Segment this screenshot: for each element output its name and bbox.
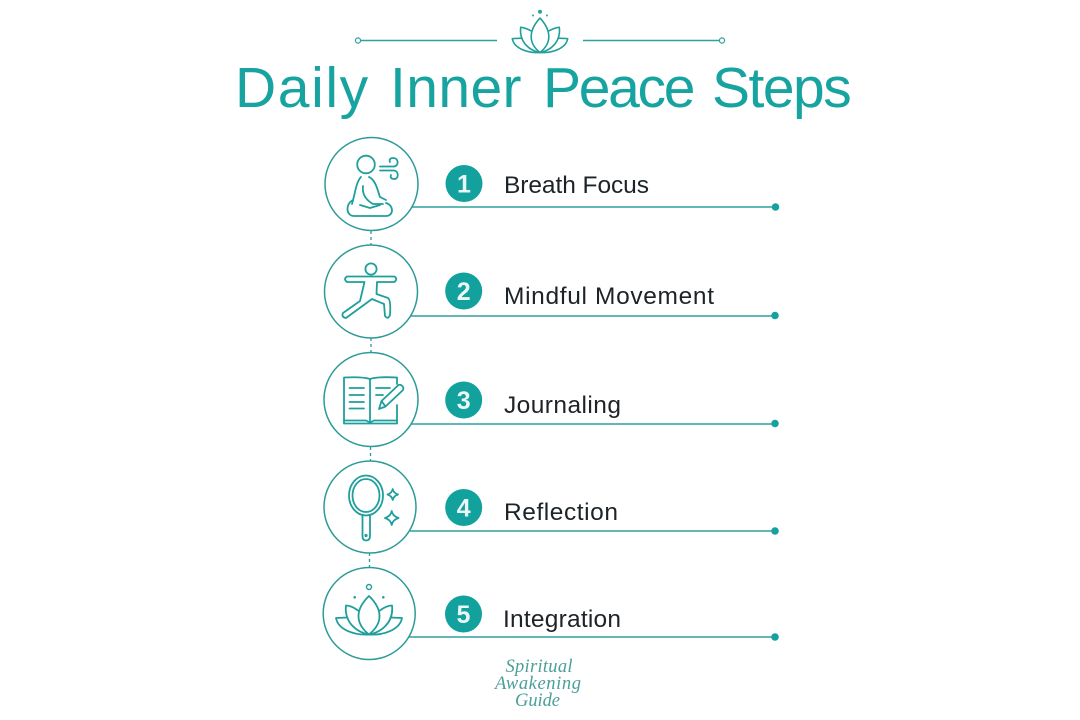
step 2: Mindful Movement [324, 245, 779, 338]
footer brand text: Guide [515, 691, 560, 711]
step number 4: 4 [457, 494, 471, 522]
step number 4 [445, 489, 482, 526]
icon: lotus flower [336, 584, 402, 635]
icon: warrior yoga pose [342, 263, 396, 318]
step 1: Breath Focus [325, 138, 779, 230]
label: Integration: Integration [503, 606, 621, 633]
title: Daily [235, 56, 370, 120]
icon: open journal and pen [344, 377, 403, 424]
step 4: Reflection [324, 461, 779, 553]
step number 1: 1 [457, 170, 471, 198]
title: Steps [712, 56, 850, 120]
step number 1 [446, 165, 482, 202]
footer brand text [493, 657, 581, 711]
step number 3: 3 [457, 387, 471, 415]
step number 2: 2 [457, 278, 471, 306]
step number 5: 5 [457, 601, 471, 629]
icon: meditating figure breathing [347, 156, 398, 216]
header ornament with lotus [355, 10, 725, 53]
label: Journaling: Journaling [504, 392, 621, 419]
label: Reflection: Reflection [504, 499, 618, 526]
label: Mindful Movement: Mindful Movement [504, 283, 714, 310]
step number 2 [445, 272, 482, 310]
step number 3 [445, 382, 482, 418]
step 5: Integration [323, 568, 779, 660]
dashed connectors between steps [370, 231, 371, 568]
footer brand text: Awakening [493, 674, 581, 694]
title: Peace [543, 56, 694, 120]
title: Inner [390, 56, 522, 120]
step number 5 [445, 596, 482, 632]
step 3: Journaling [324, 352, 779, 446]
icon: hand mirror with sparkles [349, 476, 398, 540]
label: Breath Focus: Breath Focus [504, 172, 649, 199]
footer brand text: Spiritual [506, 657, 572, 677]
